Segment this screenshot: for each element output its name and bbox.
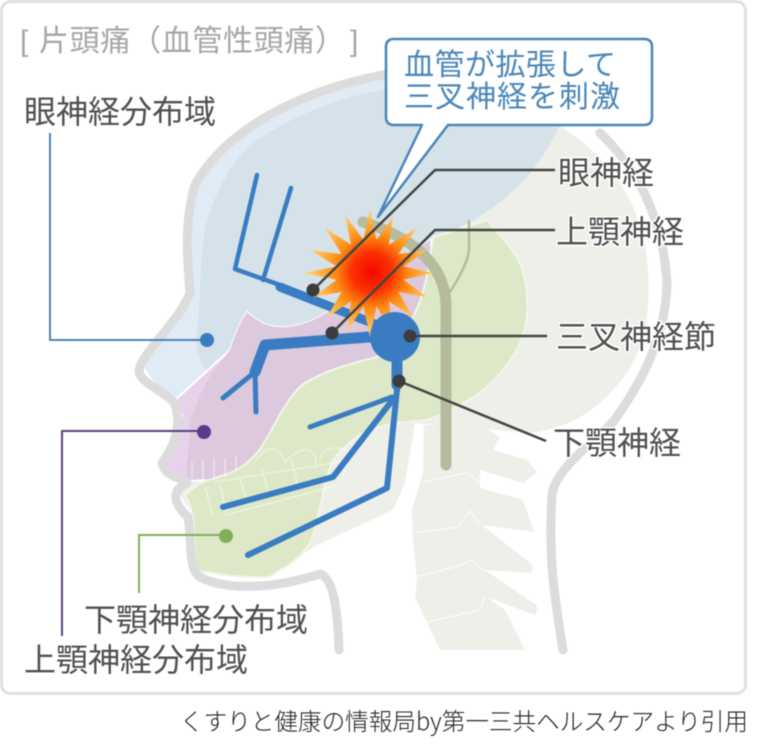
neck vertebrae <box>412 425 537 650</box>
vertebra separators <box>414 472 485 622</box>
artery <box>363 222 446 465</box>
label: maxillary nerve: 上顎神経 <box>556 214 684 250</box>
ophthalmic nerve <box>235 175 291 285</box>
leader: maxillary area <box>62 425 211 636</box>
ganglion <box>370 312 420 362</box>
callout <box>378 39 652 217</box>
skull base <box>150 84 649 577</box>
explosion: pain <box>303 210 433 337</box>
leader: ophthalmic area <box>50 133 214 347</box>
label: maxillary area: 上顎神経分布域 <box>24 642 248 678</box>
heading: title: 片頭痛（血管性頭痛） <box>39 16 345 60</box>
mandibular nerve <box>392 345 402 385</box>
leader: mandibular area <box>139 529 233 593</box>
heading: title: [ <box>20 25 29 58</box>
label: ophthalmic nerve: 眼神経 <box>558 155 654 191</box>
callout: 三叉神経を刺激 <box>404 81 620 114</box>
label: ophthalmic area: 眼神経分布域 <box>24 94 216 130</box>
teeth <box>192 448 350 515</box>
diagram: head cross-section <box>139 74 667 650</box>
mandibular nerve area <box>185 220 528 577</box>
label: trigeminal ganglion: 三叉神経節 <box>556 319 716 355</box>
leader dots <box>306 284 416 388</box>
leader lines <box>313 170 555 441</box>
label: mandibular nerve: 下顎神経 <box>553 425 681 461</box>
callout text: 血管が拡張して <box>404 49 616 82</box>
heading: title: ] <box>350 25 358 58</box>
callout bubble <box>378 39 652 217</box>
maxillary nerve area: skin <box>163 240 430 482</box>
nerves <box>223 175 397 555</box>
artery branch <box>449 220 469 293</box>
ophthalmic nerve area: skin <box>145 76 560 402</box>
head outline <box>139 74 667 650</box>
ophthalmic nerve area: bone <box>196 85 560 376</box>
caption: source: くすりと健康の情報局by第一三共ヘルスケアより引用 <box>180 702 748 737</box>
maxillary nerve area: bone <box>187 240 430 480</box>
label: mandibular area: 下顎神経分布域 <box>84 602 308 638</box>
maxillary nerve <box>255 335 395 372</box>
